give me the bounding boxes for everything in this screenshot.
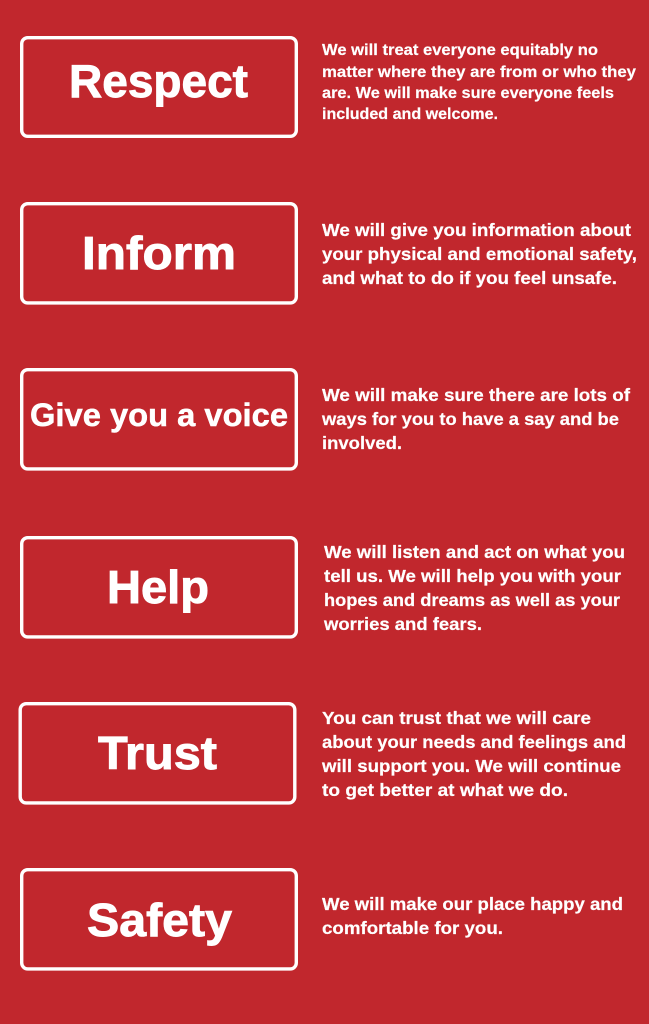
panel: inform [22,204,637,303]
text: trust description: about your needs and feelings and [322,732,626,752]
heading: inform: Inform [82,227,236,279]
text: inform description: and what to do if you feel unsafe. [322,268,617,288]
text: respect description: are. We will make sure everyone feels [322,85,614,102]
box: help [22,538,296,637]
panel: give you a voice [22,370,630,469]
box: respect [22,38,296,136]
panel: trust [20,704,626,803]
heading: safety: Safety [87,894,232,946]
text: inform description: your physical and emotional safety, [322,244,637,264]
heading: give you a voice: Give you a voice [30,397,288,433]
text: inform description [322,220,637,288]
text: voice description: We will make sure there are lots of [322,385,630,405]
text: voice description: involved. [322,433,402,453]
box: safety [22,870,296,969]
panel: safety [22,870,623,969]
text: respect description: matter where they are from or who they [322,64,636,81]
text: help description [323,542,625,634]
text: help description: hopes and dreams as well as your [324,590,620,610]
text: safety description: comfortable for you. [322,918,503,938]
box: trust [20,704,295,803]
text: inform description: We will give you information about [322,220,631,240]
text: safety description: We will make our place happy and [322,894,623,914]
box: give you a voice [22,370,296,469]
box: inform [22,204,296,303]
panel: respect [22,38,636,136]
text: help description: tell us. We will help you with your [324,566,621,586]
panel: help [22,538,625,637]
heading: help: Help [107,561,209,613]
text: respect description: included and welcome. [322,106,498,123]
text: voice description: ways for you to have a say and be [321,409,619,429]
text: respect description [322,42,636,123]
text: trust description: will support you. We will continue [321,756,621,776]
text: safety description [322,894,623,938]
text: trust description: to get better at what we do. [322,780,568,800]
text: voice description [321,385,630,453]
text: help description: We will listen and act on what you [324,542,625,562]
heading: respect: Respect [69,55,248,107]
text: trust description: You can trust that we will care [322,708,591,728]
text: help description: worries and fears. [323,614,482,634]
text: trust description [321,708,626,800]
text: respect description: We will treat everyone equitably no [322,42,598,59]
heading: trust: Trust [98,727,217,779]
